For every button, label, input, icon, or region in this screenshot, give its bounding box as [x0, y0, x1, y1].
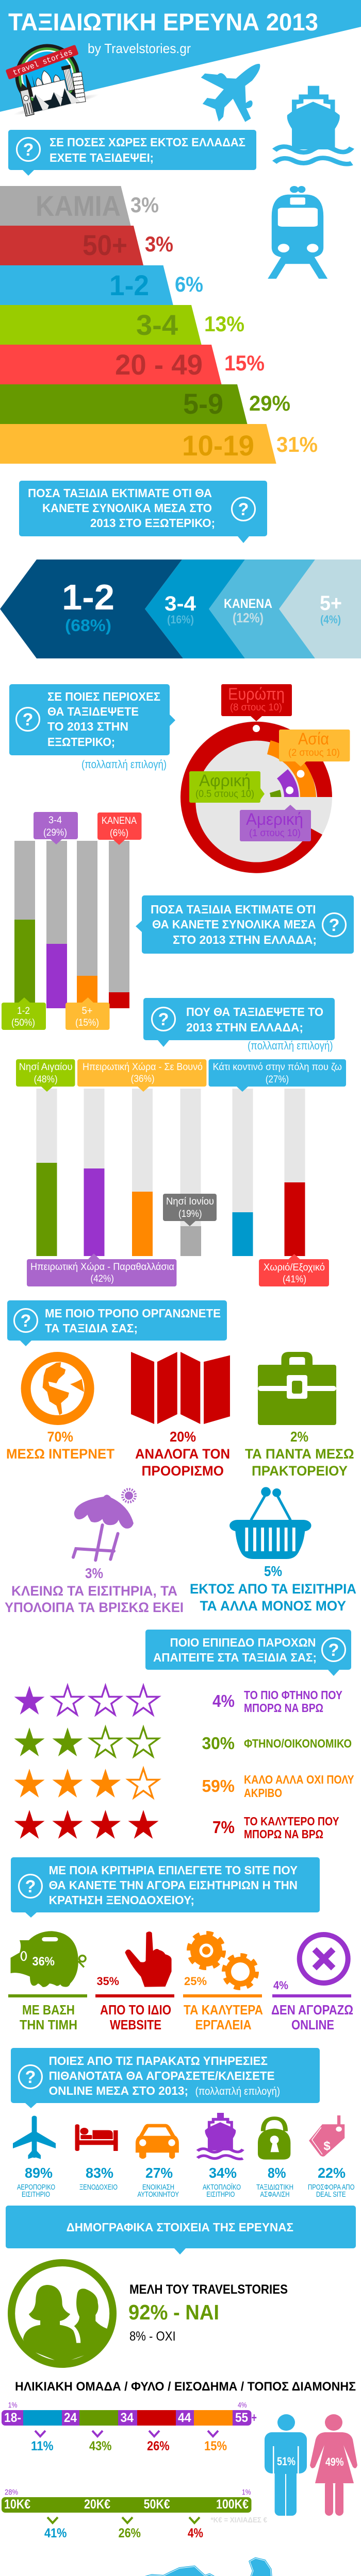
label: mainland mountain: Ηπειρωτική Χώρα - Σε Βουνό [83, 1062, 203, 1073]
chevron chart: trips abroad [0, 560, 361, 658]
logo: travel stories (top) [4, 37, 100, 118]
rating row: three stars: 59% [202, 1776, 235, 1795]
callout: trips in Greece [136, 895, 354, 954]
icon: no purchase [300, 1935, 348, 1983]
stat: travel insurance: 8% [268, 2165, 286, 2181]
bar: income: 10Κ€ [4, 2497, 30, 2512]
callout: site selection criteria: ? [25, 1877, 36, 1896]
rating row: one star: 4% [212, 1691, 235, 1710]
bar: age groups: 55 [235, 2411, 248, 2425]
stat: hotel: ΞΕΝΟΔΟΧΕΙΟ [79, 2183, 118, 2192]
callout: online services: (πολλαπλή επιλογή) [195, 2086, 280, 2097]
icon: pointing hand [125, 1931, 172, 1987]
label: 3-4: 3-4 [48, 815, 62, 826]
bar: age groups: 34 [121, 2411, 134, 2425]
callout: regions abroad: ΘΑ ΤΑΞΙΔΕΨΕΤΕ [47, 705, 139, 718]
callout: trip organisation: ? [21, 1311, 31, 1331]
segment: 1-2: 1-2 [62, 577, 114, 617]
stat: ferry ticket [203, 2165, 241, 2199]
icon: ship [274, 86, 352, 164]
label: Asia: Ασία [298, 730, 329, 748]
bar: age groups: 1% [8, 2401, 18, 2410]
map: Greece [20, 2558, 334, 2576]
callout: regions abroad: ΕΞΩΤΕΡΙΚΟ; [47, 735, 115, 749]
label: mainland seaside [27, 1253, 176, 1286]
label: mainland seaside: (42%) [90, 1274, 114, 1284]
callout: site selection criteria: ΚΡΑΤΗΣΗ ΞΕΝΟΔΟΧΕΙΟΥ; [49, 1893, 194, 1907]
callout: trips in Greece: ? [329, 916, 339, 935]
column chart: where in Greece [16, 1059, 346, 1286]
stat: hotel [79, 2165, 118, 2192]
stat: car rental: 27% [145, 2165, 173, 2181]
segment: none: (12%) [233, 610, 264, 625]
bar: 5-9 [0, 384, 290, 424]
label: none: ΚΑΝΕΝΑ [102, 816, 137, 826]
bar: income: 41% [44, 2526, 67, 2540]
callout: site selection criteria: ΜΕ ΠΟΙΑ ΚΡΙΤΗΡΙΑ ΕΠΙΛΕΓΕΤΕ ΤΟ SITE ΠΟΥ [49, 1863, 298, 1877]
rating row: four stars: ΤΟ ΚΑΛΥΤΕΡΟ ΠΟΥ [244, 1815, 339, 1828]
stat: travel insurance [256, 2165, 293, 2199]
criterion: own website: ΑΠΟ ΤΟ ΙΔΙΟ [100, 2002, 171, 2018]
stat: ferry ticket: 34% [209, 2165, 237, 2181]
label: Africa: (0.5 στους 10) [195, 789, 254, 800]
rating row: four stars: 7% [212, 1818, 235, 1837]
label: Asia: (2 στους 10) [288, 748, 340, 758]
stat value: own website: 35% [97, 1975, 119, 1988]
bar: 50+: 50+ [83, 229, 127, 261]
text: members stat: ΜΕΛΗ ΤΟΥ TRAVELSTORIES [129, 2282, 288, 2297]
bar: 5-9: 29% [249, 391, 290, 415]
bar: age groups: 15% [204, 2439, 227, 2453]
icon: plane top view [13, 2116, 56, 2159]
stat: via internet [6, 1429, 114, 1462]
stat: ferry ticket: ΕΙΣΙΤΗΡΙΟ [206, 2190, 235, 2199]
label: near home city [208, 1059, 346, 1092]
callout: service level [145, 1630, 351, 1676]
stat: flight ticket: 89% [25, 2165, 53, 2181]
icon: plane [201, 64, 260, 122]
criterion: price: ΤΗΝ ΤΙΜΗ [20, 2017, 77, 2032]
icon: price tag [309, 2115, 344, 2157]
stat: deal site: 22% [318, 2165, 346, 2181]
callout: countries visited: ΕΧΕΤΕ ΤΑΞΙΔΕΨΕΙ; [50, 151, 154, 164]
criterion: own website: WEBSITE [110, 2017, 161, 2032]
stat: everything by myself: ΕΚΤΟΣ ΑΠΟ ΤΑ ΕΙΣΙΤΗΡΙΑ [190, 1581, 356, 1597]
stat: book tickets only [5, 1565, 184, 1615]
bar: income: *Κ€ = ΧΙΛΙΑΔΕΣ € [210, 2516, 268, 2524]
label: mainland mountain [77, 1059, 206, 1092]
criterion: no online purchase [271, 1994, 353, 2032]
label: mainland seaside: Ηπειρωτική Χώρα - Παραθαλλάσια [30, 1262, 174, 1273]
label: near home city: Κάτι κοντινό στην πόλη που ζω [212, 1062, 342, 1073]
stat: via internet: 70% [47, 1429, 73, 1445]
bar: age groups: 4% [238, 2401, 247, 2410]
rating row: three stars: ΑΚΡΙΒΟ [244, 1786, 282, 1800]
icon: beach umbrella [73, 1489, 135, 1560]
bar: 1-2 [0, 265, 203, 305]
callout: demographics: ΔΗΜΟΓΡΑΦΙΚΑ ΣΤΟΙΧΕΙΑ ΤΗΣ ΕΡΕΥΝΑΣ [67, 2221, 293, 2234]
rating row: one star: ΜΠΟΡΩ ΝΑ ΒΡΩ [244, 1701, 323, 1715]
callout: regions abroad: ΣΕ ΠΟΙΕΣ ΠΕΡΙΟΧΕΣ [47, 690, 160, 703]
bar: 10-19 [0, 424, 318, 464]
label: Europe [221, 684, 292, 721]
label: Ionian island: Νησί Ιονίου [166, 1196, 214, 1207]
label: Africa [189, 771, 265, 803]
bar: income: 100Κ€ [216, 2497, 249, 2512]
label: Ionian island [163, 1194, 217, 1226]
icon: train [268, 186, 327, 279]
segment: 3-4 [145, 560, 245, 658]
segment: 3-4: (16%) [167, 613, 194, 626]
logo: travel stories (top): travel stories [12, 48, 74, 78]
header band [0, 0, 361, 112]
bar: age groups [2, 2401, 257, 2453]
segment: 3-4: 3-4 [165, 592, 196, 615]
label: village [259, 1254, 329, 1286]
callout: regions abroad: ΤΟ 2013 ΣΤΗΝ [47, 720, 128, 733]
callout: online services: ΠΙΘΑΝΟΤΑΤΑ ΘΑ ΑΓΟΡΑΣΕΤΕ/ΚΛΕΙΣΕΤΕ [49, 2069, 275, 2082]
bar: none: 3% [130, 193, 159, 217]
icon: piggy bank [11, 1931, 86, 1987]
callout: trip organisation: ΤΑ ΤΑΞΙΔΙΑ ΣΑΣ; [45, 1321, 138, 1335]
label: mainland mountain: (36%) [131, 1074, 155, 1084]
label: Asia [279, 730, 350, 767]
label: 5+: (15%) [75, 1018, 99, 1028]
stat: deal site: DEAL SITE [316, 2190, 346, 2199]
icon: male figure [265, 2414, 307, 2516]
bar: income [2, 2488, 268, 2540]
bar: 1-2: 6% [175, 272, 203, 296]
stat: book tickets only: 3% [85, 1565, 103, 1581]
bar: age groups: 44 [178, 2411, 191, 2425]
criterion: price [8, 1994, 87, 2032]
label: America: Αμερική [246, 810, 303, 828]
label: Africa: Αφρική [199, 771, 251, 790]
bar: none: ΚΑΜΙΑ [36, 190, 121, 222]
segment: 1-2: (68%) [65, 616, 111, 635]
icon: padlock [258, 2119, 290, 2160]
rating row: two stars [14, 1727, 352, 1756]
bar: 50+: 3% [145, 232, 173, 256]
label: America: (1 στους 10) [249, 828, 301, 839]
rating row: four stars: ΜΠΟΡΩ ΝΑ ΒΡΩ [244, 1827, 323, 1841]
stat: ferry ticket: ΑΚΤΟΠΛΟΪΚΟ [203, 2183, 241, 2192]
bar: none [0, 186, 159, 226]
callout: trips abroad: ΚΑΝΕΤΕ ΣΥΝΟΛΙΚΑ ΜΕΣΑ ΣΤΟ [42, 501, 212, 515]
callout: site selection criteria [11, 1857, 320, 1918]
callout: countries visited: ΣΕ ΠΟΣΕΣ ΧΩΡΕΣ ΕΚΤΟΣ ΕΛΛΑΔΑΣ [50, 135, 245, 149]
stat: travel insurance: ΑΣΦΑΛΙΣΗ [260, 2190, 290, 2199]
criterion: best tools: ΤΑ ΚΑΛΥΤΕΡΑ [184, 2002, 263, 2018]
icon: shopping basket [229, 1487, 311, 1559]
callout: trip organisation [7, 1300, 227, 1346]
callout: trips in Greece: ΠΟΣΑ ΤΑΞΙΔΙΑ ΕΚΤΙΜΑΤΕ ΟΤΙ [151, 903, 316, 916]
label: 1-2 [2, 997, 46, 1030]
note: multiple choice: (πολλαπλή επιλογή) [248, 1039, 333, 1052]
radial chart: regions abroad [180, 684, 350, 873]
icon: female figure: 49% [325, 2455, 343, 2468]
stat: everything by myself: 5% [264, 1563, 282, 1579]
bar: age groups: 18- [4, 2411, 21, 2425]
stat: car rental: ΑΥΤΟΚΙΝΗΤΟΥ [137, 2190, 179, 2199]
label: Aegean island: Νησί Αιγαίου [19, 1062, 73, 1073]
bar: age groups: 43% [89, 2439, 111, 2453]
segment: 5+ [279, 560, 361, 658]
label: near home city: (27%) [266, 1074, 289, 1085]
stat: by destination: 20% [170, 1429, 196, 1445]
stat: by destination: ΑΝΑΛΟΓΑ ΤΟΝ [135, 1446, 230, 1462]
bar chart: countries visited [0, 186, 318, 464]
text: members stat: 92% - ΝΑΙ [128, 2300, 219, 2324]
icon: briefcase [258, 1352, 336, 1425]
stat: flight ticket: ΕΙΣΙΤΗΡΙΟ [22, 2190, 50, 2199]
rating row: two stars: 30% [202, 1734, 235, 1753]
callout: service level: ΑΠΑΙΤΕΙΤΕ ΣΤΑ ΤΑΞΙΔΙΑ ΣΑΣ; [153, 1651, 317, 1664]
label: 5+: 5+ [81, 1006, 93, 1016]
subtitle: by Travelstories.gr [88, 41, 191, 56]
bar: income: 50Κ€ [144, 2497, 170, 2512]
callout: site selection criteria: ΘΑ ΚΑΝΕΤΕ ΤΗΝ ΑΓΟΡΑ ΕΙΣΗΤΗΡΙΩΝ Η ΤΗΝ [49, 1878, 298, 1892]
label: 3-4: (29%) [43, 827, 67, 838]
stat: by destination: ΠΡΟΟΡΙΣΜΟ [141, 1463, 224, 1479]
bar: income: 28% [5, 2488, 18, 2497]
label: village: Χωριό/Εξοχικό [264, 1262, 325, 1273]
callout: regions abroad: ? [23, 710, 33, 730]
rating row: four stars [14, 1810, 339, 1841]
callout: where in Greece: ΠΟΥ ΘΑ ΤΑΞΙΔΕΨΕΤΕ ΤΟ [186, 1005, 323, 1019]
text: members stat: 8% - ΟΧΙ [129, 2329, 176, 2344]
callout: online services: ? [25, 2067, 36, 2087]
callout: where in Greece: 2013 ΣΤΗΝ ΕΛΛΑΔΑ; [186, 1021, 303, 1034]
icon: folded map [131, 1352, 230, 1424]
icon: price tag: $ [323, 2139, 331, 2153]
stat: everything by myself [190, 1563, 356, 1614]
bar: 20-49: 15% [224, 351, 265, 375]
icon: female figure [310, 2414, 357, 2516]
label: village: (41%) [283, 1274, 306, 1285]
criterion: price: ΜΕ ΒΑΣΗ [22, 2002, 75, 2018]
callout: regions abroad [9, 684, 175, 755]
label: Aegean island [16, 1059, 75, 1092]
stat: car rental: ΕΝΟΙΚΙΑΣΗ [142, 2183, 174, 2192]
stat: flight ticket [17, 2165, 55, 2199]
callout: online services: ΠΟΙΕΣ ΑΠΟ ΤΙΣ ΠΑΡΑΚΑΤΩ ΥΠΗΡΕΣΙΕΣ [49, 2054, 268, 2067]
callout: online services [11, 2048, 320, 2108]
callout: demographics [6, 2206, 356, 2255]
heading: demographics: ΗΛΙΚΙΑΚΗ ΟΜΑΔΑ / ΦΥΛΟ / ΕΙΣΟΔΗΜΑ / ΤΟΠΟΣ ΔΙΑΜΟΝΗΣ [15, 2380, 356, 2394]
bar: 50+ [0, 226, 173, 265]
bar: 3-4: 13% [204, 312, 244, 336]
callout: trips abroad: ? [238, 500, 249, 519]
icon: bed [75, 2124, 118, 2151]
bar: 1-2: 1-2 [109, 269, 149, 301]
segment: 5+: (4%) [320, 613, 341, 626]
stat: travel insurance: ΤΑΞΙΔΙΩΤΙΚΗ [256, 2183, 293, 2192]
callout: trips abroad [19, 481, 267, 543]
column chart: trips in Greece [2, 812, 141, 1030]
stat: via agency: ΤΑ ΠΑΝΤΑ ΜΕΣΩ [245, 1446, 354, 1462]
title: ΤΑΞΙΔΙΩΤΙΚΗ ΕΡΕΥΝΑ 2013 [8, 8, 318, 36]
icon: car [136, 2124, 179, 2159]
stat: book tickets only: ΚΛΕΙΝΩ ΤΑ ΕΙΣΙΤΗΡΙΑ, ΤΑ [11, 1583, 177, 1599]
stat: hotel: 83% [86, 2165, 113, 2181]
stat: deal site [308, 2165, 355, 2199]
segment: 5+: 5+ [320, 592, 342, 615]
callout: countries visited [8, 130, 256, 176]
criterion: best tools: ΕΡΓΑΛΕΙΑ [195, 2017, 252, 2032]
bar: age groups: 11% [31, 2439, 54, 2453]
callout: service level: ΠΟΙΟ ΕΠΙΠΕΔΟ ΠΑΡΟΧΩΝ [170, 1636, 316, 1649]
icon: members [8, 2259, 117, 2368]
label: Ionian island: (19%) [178, 1209, 202, 1219]
stat: via agency [245, 1429, 354, 1479]
criterion: best tools [183, 1994, 263, 2032]
label: 1-2: (50%) [11, 1018, 35, 1028]
stat: via agency: 2% [290, 1429, 308, 1445]
text: members stat [128, 2282, 288, 2344]
label: Aegean island: (48%) [34, 1074, 58, 1085]
callout: trips in Greece: ΣΤΟ 2013 ΣΤΗΝ ΕΛΛΑΔΑ; [173, 933, 317, 946]
bar: 5-9: 5-9 [183, 387, 223, 420]
label: America [240, 805, 311, 841]
segment: 1-2 [0, 560, 183, 658]
rating row: one star: ΤΟ ΠΙΟ ΦΤΗΝΟ ΠΟΥ [244, 1688, 342, 1702]
label: none: (6%) [110, 828, 128, 839]
callout: trip organisation: ΜΕ ΠΟΙΟ ΤΡΟΠΟ ΟΡΓΑΝΩΝΕΤΕ [45, 1307, 221, 1320]
stat value: best tools: 25% [184, 1975, 207, 1988]
stat: everything by myself: ΤΑ ΑΛΛΑ ΜΟΝΟΣ ΜΟΥ [200, 1598, 346, 1614]
stat: car rental [137, 2165, 179, 2199]
bar: age groups: 24 [64, 2411, 77, 2425]
stat: book tickets only: ΥΠΟΛΟΙΠΑ ΤΑ ΒΡΙΣΚΩ ΕΚΕΙ [5, 1600, 184, 1615]
callout: trips abroad: ΠΟΣΑ ΤΑΞΙΔΙΑ ΕΚΤΙΜΑΤΕ ΟΤΙ ΘΑ [28, 486, 212, 500]
icon: globe [26, 1357, 89, 1420]
callout: where in Greece [143, 998, 335, 1047]
rating row: three stars [14, 1769, 354, 1800]
bar: 10-19: 10-19 [182, 429, 254, 462]
bar: 10-19: 31% [276, 432, 318, 456]
bar: 3-4: 3-4 [136, 309, 178, 341]
label: 1-2: 1-2 [17, 1006, 30, 1016]
segment: none: ΚΑΝΕΝΑ [224, 597, 272, 611]
bar: income: 4% [188, 2526, 203, 2540]
label: none [97, 812, 141, 845]
callout: trips in Greece: ΘΑ ΚΑΝΕΤΕ ΣΥΝΟΛΙΚΑ ΜΕΣΑ [152, 918, 316, 931]
bar: 20-49 [0, 345, 265, 384]
icon: piggy bank: 36% [32, 1955, 55, 1969]
label: 3-4 [34, 812, 78, 844]
stat value: no online purchase: 4% [273, 1979, 288, 1992]
icon: ferry [198, 2113, 243, 2159]
bar: age groups: 26% [147, 2439, 170, 2453]
label: 5+ [65, 997, 109, 1030]
callout: countries visited: ? [23, 140, 34, 160]
criterion: no online purchase: ONLINE [291, 2017, 334, 2032]
bar: age groups: + [252, 2411, 257, 2425]
callout: where in Greece: ? [158, 1010, 169, 1029]
segment: none [209, 560, 315, 658]
callout: service level: ? [329, 1640, 339, 1660]
bar: income: 20Κ€ [84, 2497, 110, 2512]
rating row: one star [14, 1686, 342, 1715]
bar: income: 26% [119, 2526, 141, 2540]
label: Europe: Ευρώπη [228, 685, 285, 703]
note: multiple choice: (πολλαπλή επιλογή) [81, 758, 167, 771]
bar: 3-4 [0, 305, 244, 345]
stat: via agency: ΠΡΑΚΤΟΡΕΙΟΥ [252, 1463, 348, 1479]
criterion: own website [95, 1994, 174, 2032]
callout: online services: ONLINE ΜΕΣΑ ΣΤΟ 2013; [49, 2084, 188, 2097]
icon: gears [189, 1934, 256, 1988]
stat: by destination [135, 1429, 230, 1479]
label: Europe: (8 στους 10) [230, 702, 282, 713]
stat: flight ticket: ΑΕΡΟΠΟΡΙΚΟ [17, 2183, 55, 2192]
callout: trips abroad: 2013 ΣΤΟ ΕΞΩΤΕΡΙΚΟ; [90, 516, 215, 530]
bar: income: 1% [242, 2488, 251, 2497]
stat: via internet: ΜΕΣΩ ΙΝΤΕΡΝΕΤ [6, 1446, 114, 1462]
bar: 20-49: 20 - 49 [115, 348, 203, 381]
icon: male figure: 51% [277, 2455, 296, 2468]
